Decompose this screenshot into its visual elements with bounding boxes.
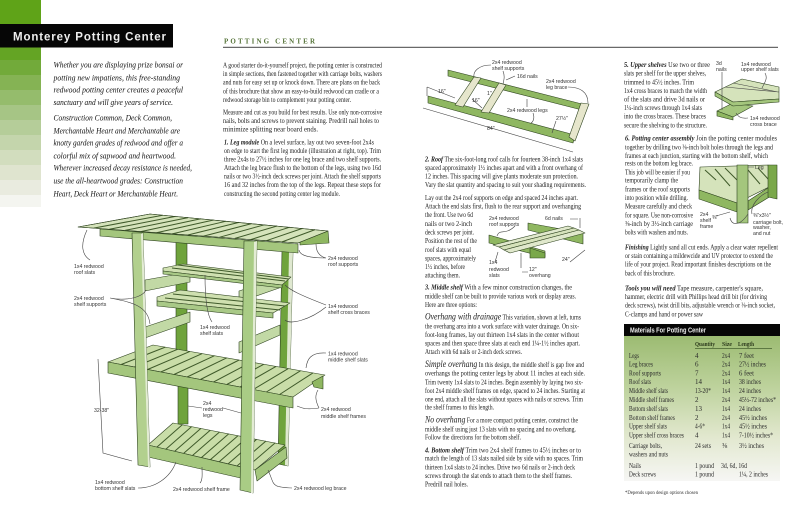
- intro text: Construction Common, Deck Common,: [54, 112, 172, 122]
- dimension and callout lines: [423, 65, 588, 152]
- intro text: use the all-heartwood grades: Construction: [54, 176, 183, 186]
- table rows: 38 inches: [739, 378, 761, 386]
- text: potting center assembly: for square. Use non-corrosive: [625, 212, 693, 219]
- shelf supports: [145, 272, 282, 353]
- text: middle and bottom shelf: Predrill nail holes.: [425, 482, 468, 489]
- callouts: [83, 230, 326, 488]
- text: tools: [625, 285, 775, 318]
- part labels: bottom shelf slats: [95, 486, 136, 492]
- part labels: middle shelf slats: [328, 358, 368, 364]
- footnote: *Depends upon design options chosen: [625, 490, 698, 496]
- text: roof: Vary the slat quantity and spacing to suit your shading requirements.: [425, 182, 586, 189]
- text: middle and bottom shelf: Attach with 6d nails or 2-inch deck screws.: [425, 349, 522, 356]
- text: potting center assembly: temporarily clamp the: [625, 178, 678, 185]
- text: tools: hammer, electric drill with Phillips head drill bit (for driving: [625, 294, 767, 301]
- part labels: 1x4 redwood: [200, 325, 230, 331]
- text: potting center assembly: bolts with washers and nuts.: [625, 229, 688, 236]
- part labels: 1x4 redwood: [74, 264, 104, 270]
- part labels: shelf supports: [74, 302, 107, 308]
- assembly illustration: [699, 165, 783, 237]
- intro text: potting new impatiens, this free-standing: [53, 72, 181, 82]
- upper shelf: [163, 264, 291, 288]
- table rows: 4: [695, 432, 699, 440]
- intro text: Wherever increased decay resistance is needed,: [54, 162, 192, 172]
- leg module illustration: 27½": [556, 115, 568, 122]
- text: introduction and leg module: A good starter do-it-yourself project, the potting center is constructed: [223, 62, 382, 69]
- back legs: [176, 238, 293, 466]
- text: roof: nails or two 2-inch: [425, 221, 472, 228]
- roof: [78, 214, 329, 253]
- roof layout illustration: [489, 216, 585, 279]
- roof layout illustration: redwood: [489, 267, 509, 273]
- text: roof: deck screws per joint.: [425, 229, 474, 236]
- upper shelf illustration: 1x4 redwood: [750, 116, 780, 122]
- table rows: Bottom shelf slats: [629, 405, 668, 413]
- text: roof: 12 inches. This spacing will give plants moderate sun protection.: [425, 174, 578, 181]
- table header: Materials For Potting Center: [630, 328, 706, 334]
- upper shelf illustration: 3d: [716, 61, 722, 67]
- text: introduction and leg module: 16 and 32 inches from the top of the legs. Repeat these steps for: [224, 182, 382, 189]
- part labels: middle shelf frames: [321, 414, 366, 420]
- text: introduction and leg module: Attach the leg brace flush to the bottom of the legs, using two 16d: [224, 165, 381, 172]
- table rows: 1x4: [722, 405, 730, 413]
- table rows: 27½ inches: [739, 360, 766, 368]
- text: upper shelves: of the slats and drive 3d nails or: [624, 96, 706, 103]
- text: middle and bottom shelf: Overhang with drainage This variation, shown at left, turns: [425, 313, 581, 323]
- column headings: Quantity: [695, 342, 715, 348]
- text: potting center assembly: into position while drilling.: [625, 195, 688, 202]
- front legs: [132, 233, 257, 493]
- text: upper shelves: into the cross braces. These braces: [624, 114, 706, 121]
- table rows: 2: [695, 414, 699, 422]
- text: middle and bottom shelf: foot-long frames, lay out thirteen 1x4 slats in the center without: [425, 332, 579, 339]
- table header: [624, 324, 780, 336]
- part labels: 2x4: [203, 401, 211, 407]
- part labels: shelf slats: [200, 331, 223, 337]
- materials table: [624, 324, 780, 481]
- table rows: 1x4: [722, 378, 730, 386]
- text: middle and bottom shelf: Follow the directions for the bottom shelf.: [425, 434, 521, 441]
- table rows: 4-6*: [695, 422, 705, 430]
- column headings: Size: [722, 342, 732, 348]
- leg module illustration: 2x4 redwood: [492, 60, 522, 66]
- table rows: ⅜: [722, 442, 728, 450]
- table rows: 1x4: [722, 422, 730, 430]
- part labels: 2x4 redwood: [321, 407, 351, 413]
- text: introduction and leg module: of this brochure that show an easy-to-build redwood can cradle or a: [223, 88, 379, 95]
- text: finishing: Finishing Lightly sand all cut ends. Apply a clear water repellent: [625, 244, 778, 251]
- roof layout illustration: slats: [489, 273, 500, 279]
- text: upper shelves: [624, 62, 710, 129]
- table rows: Upper shelf slats: [629, 422, 667, 430]
- leg module illustration: 84": [487, 126, 495, 132]
- table rows: 2x4: [722, 352, 730, 360]
- roof layout illustration: 24": [562, 257, 570, 263]
- intro text: knotty garden grades of redwood and offer a: [54, 138, 183, 148]
- text: introduction and leg module: and nuts for easy set up or knock down. There are plans on the back: [223, 80, 380, 87]
- roof layout illustration: roof supports: [489, 222, 520, 228]
- table rows: 45½ inches: [739, 414, 767, 422]
- leg module illustration: [423, 60, 589, 152]
- text: upper shelves: 1¼-inch screws through 1x4 slats: [624, 105, 702, 112]
- text: roof: [424, 156, 586, 280]
- assembly illustration: frame: [700, 224, 713, 230]
- table rows: 14: [695, 378, 702, 386]
- text: roof: Position the rest of the: [425, 238, 477, 245]
- part labels: 1x4 redwood: [95, 480, 125, 486]
- text: middle and bottom shelf: 4. Bottom shelf Trim two 2x4 shelf frames to 45½ inches or to: [424, 447, 581, 454]
- text: middle and bottom shelf: Here are three options:: [425, 302, 477, 309]
- height dimension: [98, 359, 132, 461]
- leg module illustration: 16": [438, 89, 446, 95]
- table rows: 45½-72 inches*: [739, 396, 776, 404]
- table rows: Upper shelf cross braces: [629, 432, 684, 440]
- text: middle and bottom shelf: 3. Middle shelf With a few minor construction changes, the: [424, 285, 572, 292]
- roof layout illustration: 12": [529, 267, 537, 273]
- text: potting center assembly: 6. Potting center assembly Join the potting center modules: [625, 136, 777, 143]
- table rows: washers and nuts: [629, 450, 668, 458]
- bottom shelf: [148, 423, 287, 481]
- part labels: roof supports: [328, 262, 359, 268]
- table rows: 2x4: [722, 360, 730, 368]
- upper shelf illustration: 1x4 redwood: [741, 62, 771, 68]
- text: introduction and leg module: in simple sections, then fastened together with carriage bolts, washers: [223, 71, 382, 78]
- table rows: 24 inches: [739, 405, 761, 413]
- text: upper shelves: 5. Upper shelves Use two or three: [624, 62, 710, 69]
- text: potting center assembly: [625, 136, 777, 236]
- text: introduction and leg module: Measure and cut as you build for best results. Use only non-corrosive: [223, 110, 382, 117]
- upper shelf illustration: upper shelf slats: [741, 67, 779, 73]
- text: introduction and leg module: on edge to start the first leg module (illustration at right, top). Trim: [224, 148, 382, 155]
- text: finishing: or stain containing a mildewcide and UV protector to extend the: [625, 253, 773, 260]
- text: middle and bottom shelf: overhangs the potting center legs by about 11 inches at each side.: [425, 371, 585, 378]
- text: roof: the front. Use two 6d: [425, 212, 473, 219]
- main illustration: potting center: [74, 214, 370, 493]
- section heading: POTTING CENTER: [224, 38, 316, 46]
- text: potting center assembly: rests on the bottom leg brace.: [625, 160, 693, 167]
- text: introduction and leg module: nails, bolts and screws to prevent staining. Predrill nail holes to: [223, 118, 379, 125]
- text: introduction and leg module: minimize splitting near board ends.: [223, 127, 318, 134]
- table rows: 24 inches: [739, 387, 761, 395]
- table rows: Legs: [629, 352, 639, 360]
- intro text: colorful mix of sapwood and heartwood.: [54, 150, 176, 160]
- leg module illustration: leg brace: [546, 85, 567, 91]
- assembly illustration: Leg: [755, 165, 764, 171]
- text: roof: roof slats with equal: [425, 247, 471, 254]
- table rows: 2: [695, 396, 699, 404]
- part labels: shelf cross braces: [328, 310, 370, 316]
- assembly illustration: and nut: [753, 231, 771, 237]
- part labels: roof slats: [74, 270, 95, 276]
- text: middle and bottom shelf: the shelf frames to this length.: [425, 404, 494, 411]
- upper shelf illustration: cross brace: [750, 122, 777, 128]
- text: roof: 2. Roof The six-foot-long roof calls for fourteen 38-inch 1x4 slats: [424, 156, 583, 163]
- part labels: 1x4 redwood: [328, 304, 358, 310]
- second upper shelf: [157, 290, 290, 318]
- title: [0, 24, 173, 48]
- text: upper shelves: secure the shelving to the structure.: [624, 122, 707, 129]
- intro text: Merchantable Heart and Merchantable are: [53, 126, 180, 136]
- text: middle and bottom shelf: match the length of 13 slats nailed side by side with no spaces. Trim: [425, 456, 584, 463]
- part labels: 2x4 redwood leg brace: [294, 486, 347, 492]
- text: middle and bottom shelf: [424, 285, 585, 489]
- text: potting center assembly: frames at each junction, starting with the bottom shelf, which: [625, 153, 768, 160]
- table rows: [629, 352, 776, 478]
- text: finishing: life of your project. Read important finishes descriptions on the: [625, 262, 771, 269]
- column headings: Length: [738, 342, 755, 348]
- middle shelf: [108, 345, 325, 408]
- leg module illustration: 2x4 redwood: [546, 79, 576, 85]
- text: potting center assembly: frames or the roof supports: [625, 186, 690, 193]
- table rows: 1x4: [722, 387, 730, 395]
- intro text: redwood potting center creates a peaceful: [54, 84, 184, 94]
- text: upper shelves: slats per shelf for the upper shelves,: [624, 71, 706, 78]
- text: middle and bottom shelf: Trim twenty 1x4 slats to 24 inches. Begin assembly by laying two six-: [425, 379, 584, 386]
- text: middle and bottom shelf: middle shelf using just 13 slats with no spacing and no overhang.: [425, 426, 576, 433]
- text: roof: Lay out the 2x4 roof supports on edge and spaced 24 inches apart.: [425, 195, 578, 202]
- table rows: Middle shelf frames: [629, 396, 674, 404]
- text: middle and bottom shelf: screws through the slat ends to attach them to the shelf frames.: [425, 473, 572, 480]
- upper shelf illustration: nails: [716, 67, 727, 73]
- text: roof: spaced approximately 1½ inches apart and with a front overhang of: [425, 165, 584, 172]
- leg module illustration: shelf supports: [492, 66, 525, 72]
- intro text: [53, 60, 192, 198]
- roof layout illustration: 1x4: [489, 260, 497, 266]
- title: Monterey Potting Center: [13, 32, 167, 44]
- table rows: 3½ inches: [739, 442, 764, 450]
- assembly illustration: ⅜"x3½": [753, 212, 771, 219]
- part labels: 2x4 redwood: [328, 256, 358, 262]
- roof layout illustration: 2x4 redwood: [489, 216, 519, 222]
- leg module illustration: 1": [487, 91, 492, 97]
- table rows: 24 sets: [695, 442, 711, 450]
- text: finishing: [625, 244, 778, 277]
- text: roof: attaching them.: [425, 273, 460, 280]
- upper shelf illustration: [715, 61, 780, 128]
- intro text: Heart, Deck Heart or Merchantable Heart.: [53, 188, 178, 198]
- table rows: 6: [695, 360, 699, 368]
- text: upper shelves: trimmed to 45½ inches. Trim: [624, 79, 695, 86]
- table rows: 45½ inches: [739, 422, 767, 430]
- table rows: 1 pound: [695, 470, 714, 478]
- part labels: redwood: [203, 407, 223, 413]
- part labels: 32-38": [94, 408, 109, 414]
- text: tools: C-clamps and hand or power saw: [625, 311, 703, 318]
- intro text: sanctuary and will give years of service.: [54, 97, 173, 107]
- text: tools: Tools you will need Tape measure, carpenter's square,: [625, 285, 763, 292]
- assembly illustration: washer,: [753, 225, 771, 231]
- leg module illustration: 2x4 redwood legs: [507, 108, 548, 114]
- text: potting center assembly: together by drilling two ⅜-inch bolt holes through the legs and: [625, 144, 773, 151]
- table rows: 2x4: [722, 414, 730, 422]
- text: middle and bottom shelf: foot 2x4 middle shelf frames on edge, spaced to 24 inches. Starting at: [425, 388, 585, 395]
- text: roof: spaces, approximately: [425, 256, 476, 263]
- text: finishing: back of this brochure.: [625, 270, 675, 277]
- roof layout illustration: overhang: [529, 273, 551, 279]
- table rows: Roof supports: [629, 370, 661, 378]
- text: introduction and leg module: redwood storage bin to complement your potting center.: [223, 97, 351, 104]
- table rows: 6 feet: [739, 370, 754, 378]
- text: upper shelves: 1x4 cross braces to match the width: [624, 88, 707, 95]
- column headings: [695, 342, 772, 349]
- roof layout illustration: 6d nails: [545, 216, 563, 222]
- text: introduction and leg module: 1. Leg module On a level surface, lay out two seven-foot 2x4s: [224, 140, 374, 147]
- leg module illustration: 16d nails: [517, 74, 538, 80]
- table rows: Leg braces: [629, 360, 653, 368]
- table rows: 7 feet: [739, 352, 754, 360]
- table rows: 1¼, 2 inches: [739, 470, 768, 478]
- text: potting center assembly: ⅜-inch by 3½-inch carriage: [625, 221, 693, 228]
- text: middle and bottom shelf: middle shelf can be built to provide various work or display areas.: [425, 293, 576, 300]
- table rows: Roof slats: [629, 378, 651, 386]
- table rows: 3d, 6d, 16d: [721, 462, 747, 470]
- assembly illustration: shelf: [700, 218, 712, 224]
- assembly illustration: carriage bolt,: [753, 220, 783, 226]
- text: middle and bottom shelf: one end, attach all the slats without spaces with nails or screws. Trim: [425, 396, 584, 403]
- table rows: 2x4: [722, 396, 730, 404]
- text: roof: Attach the end slats first, flush to the rear support and overhanging: [425, 204, 581, 211]
- table rows: Middle shelf slats: [629, 387, 668, 395]
- table rows: 13-20*: [695, 387, 711, 395]
- text: middle and bottom shelf: the overhang area into a work surface with water drainage. On six-: [425, 323, 580, 330]
- text: potting center assembly: This job will be easier if you: [625, 169, 690, 176]
- text: introduction and leg module: constructing the second potting center leg module.: [224, 191, 340, 198]
- green side strip: [0, 0, 41, 207]
- table rows: 7-10½ inches*: [739, 432, 773, 440]
- assembly illustration: ⅜": [712, 215, 718, 221]
- table rows: Bottom shelf frames: [629, 414, 675, 422]
- text: introduction and leg module: three 2x4s to 27½ inches for one leg brace and two shelf supports.: [224, 157, 381, 164]
- table rows: Carriage bolts,: [629, 442, 662, 450]
- text: roof: 1½ inches, before: [425, 264, 465, 271]
- table rows: 2x4: [722, 370, 730, 378]
- table rows: 1x4: [722, 432, 730, 440]
- text: introduction and leg module: [223, 62, 382, 198]
- text: middle and bottom shelf: thirteen 1x4 slats to 24 inches. Drive two 6d nails or 2-inch deck: [425, 464, 575, 471]
- table rows: 4: [695, 352, 699, 360]
- part labels: [74, 256, 370, 493]
- leg module illustration: 16": [472, 98, 480, 104]
- table rows: Nails: [629, 462, 641, 470]
- table rows: 13: [695, 405, 702, 413]
- text: middle and bottom shelf: Simple overhang In this design, the middle shelf is gap free and: [425, 360, 584, 370]
- part labels: 2x4 redwood: [74, 296, 104, 302]
- table rows: Deck screws: [629, 470, 656, 478]
- part labels: legs: [203, 413, 213, 419]
- intro text: Whether you are displaying prize bonsai or: [54, 60, 184, 70]
- table rows: 7: [695, 370, 699, 378]
- text: potting center assembly: Measure carefully and check: [625, 204, 692, 211]
- part labels: 1x4 redwood: [328, 352, 358, 358]
- text: middle and bottom shelf: No overhang For a more compact potting center, construct the: [424, 416, 578, 426]
- part labels: 2x4 redwood shelf frame: [173, 487, 230, 493]
- table rows: 1 pound: [695, 462, 714, 470]
- text: middle and bottom shelf: spaces and then space three slats at each end 1¼-1½ inches apart.: [425, 341, 580, 348]
- text: introduction and leg module: nails or two 3½-inch deck screws per joint. Attach the shelf supports: [224, 174, 381, 181]
- assembly illustration: 2x4: [700, 212, 708, 218]
